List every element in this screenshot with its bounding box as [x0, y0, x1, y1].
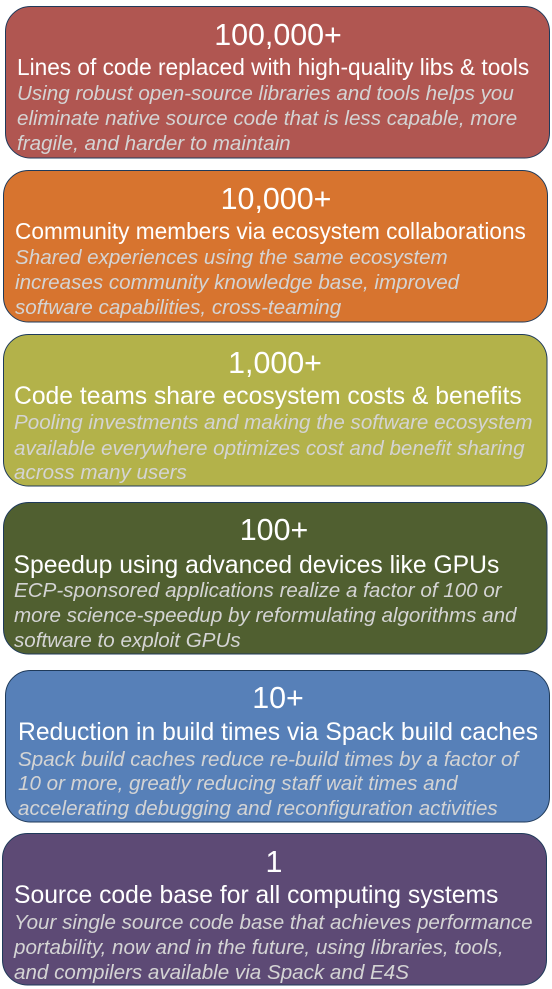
panel: 1,000+ code teams: 1,000+: [228, 346, 322, 380]
panel: 100+ speedup: software to exploit GPUs: [14, 629, 241, 652]
panel: 10+ build time reduction: Spack build caches reduce re-build times by a factor of: [18, 748, 521, 771]
panel: 100+ speedup: more science-speedup by reformulating algorithms and: [14, 604, 517, 627]
panel: 100,000+ lines of code: fragile, and harder to maintain: [17, 132, 291, 155]
panel: 10+ build time reduction: Reduction in build times via Spack build caches: [18, 719, 538, 746]
panel: 1,000+ code teams: across many users: [14, 461, 187, 484]
panel: 10+ build time reduction: accelerating debugging and reconfiguration activities: [18, 797, 498, 820]
panel: 100,000+ lines of code: Using robust open-source libraries and tools helps you: [17, 82, 514, 105]
panel: 100,000+ lines of code: 100,000+: [214, 18, 342, 52]
panel: 100,000+ lines of code: [6, 6, 550, 158]
panel: 10+ build time reduction: 10+: [252, 681, 304, 715]
panel: 1,000+ code teams: Code teams share ecosystem costs & benefits: [14, 383, 522, 410]
panel: 10,000+ community members: 10,000+: [221, 182, 331, 216]
panel: 10,000+ community members: Community members via ecosystem collaborations: [15, 218, 526, 244]
panel: 100,000+ lines of code: eliminate native source code that is less capable, more: [17, 107, 517, 130]
panel: 10,000+ community members: software capabilities, cross-teaming: [15, 296, 342, 319]
panel: 1,000+ code teams: Pooling investments and making the software ecosystem: [14, 411, 533, 434]
panel: 1 source code base: portability, now and in the future, using libraries, tools,: [13, 936, 504, 959]
panel: 100,000+ lines of code: Lines of code replaced with high-quality libs & tools: [17, 54, 529, 80]
panel: 10+ build time reduction: 10 or more, greatly reducing staff wait times and: [18, 772, 458, 795]
panel: 1 source code base: and compilers available via Spack and E4S: [14, 961, 409, 984]
panel: 1 source code base: Source code base for all computing systems: [14, 882, 498, 909]
panel: 100+ speedup: Speedup using advanced devices like GPUs: [14, 552, 499, 579]
panel: 10+ build time reduction: [6, 670, 550, 822]
panel: 1 source code base: Your single source code base that achieves performance: [14, 911, 533, 934]
panel: 100+ speedup: 100+: [240, 513, 308, 547]
panel: 100+ speedup: [4, 502, 547, 654]
panel: 1,000+ code teams: available everywhere optimizes cost and benefit sharing: [14, 437, 525, 460]
panel: 10,000+ community members: Shared experiences using the same ecosystem: [15, 246, 448, 269]
panel: 1 source code base: 1: [266, 845, 282, 879]
panel: 10,000+ community members: increases community knowledge base, improved: [15, 271, 460, 294]
panel: 10,000+ community members: [4, 170, 548, 322]
panel: 1,000+ code teams: [4, 334, 547, 486]
panel: 100+ speedup: ECP-sponsored applications realize a factor of 100 or: [14, 579, 503, 602]
panel: 1 source code base: [2, 834, 546, 985]
